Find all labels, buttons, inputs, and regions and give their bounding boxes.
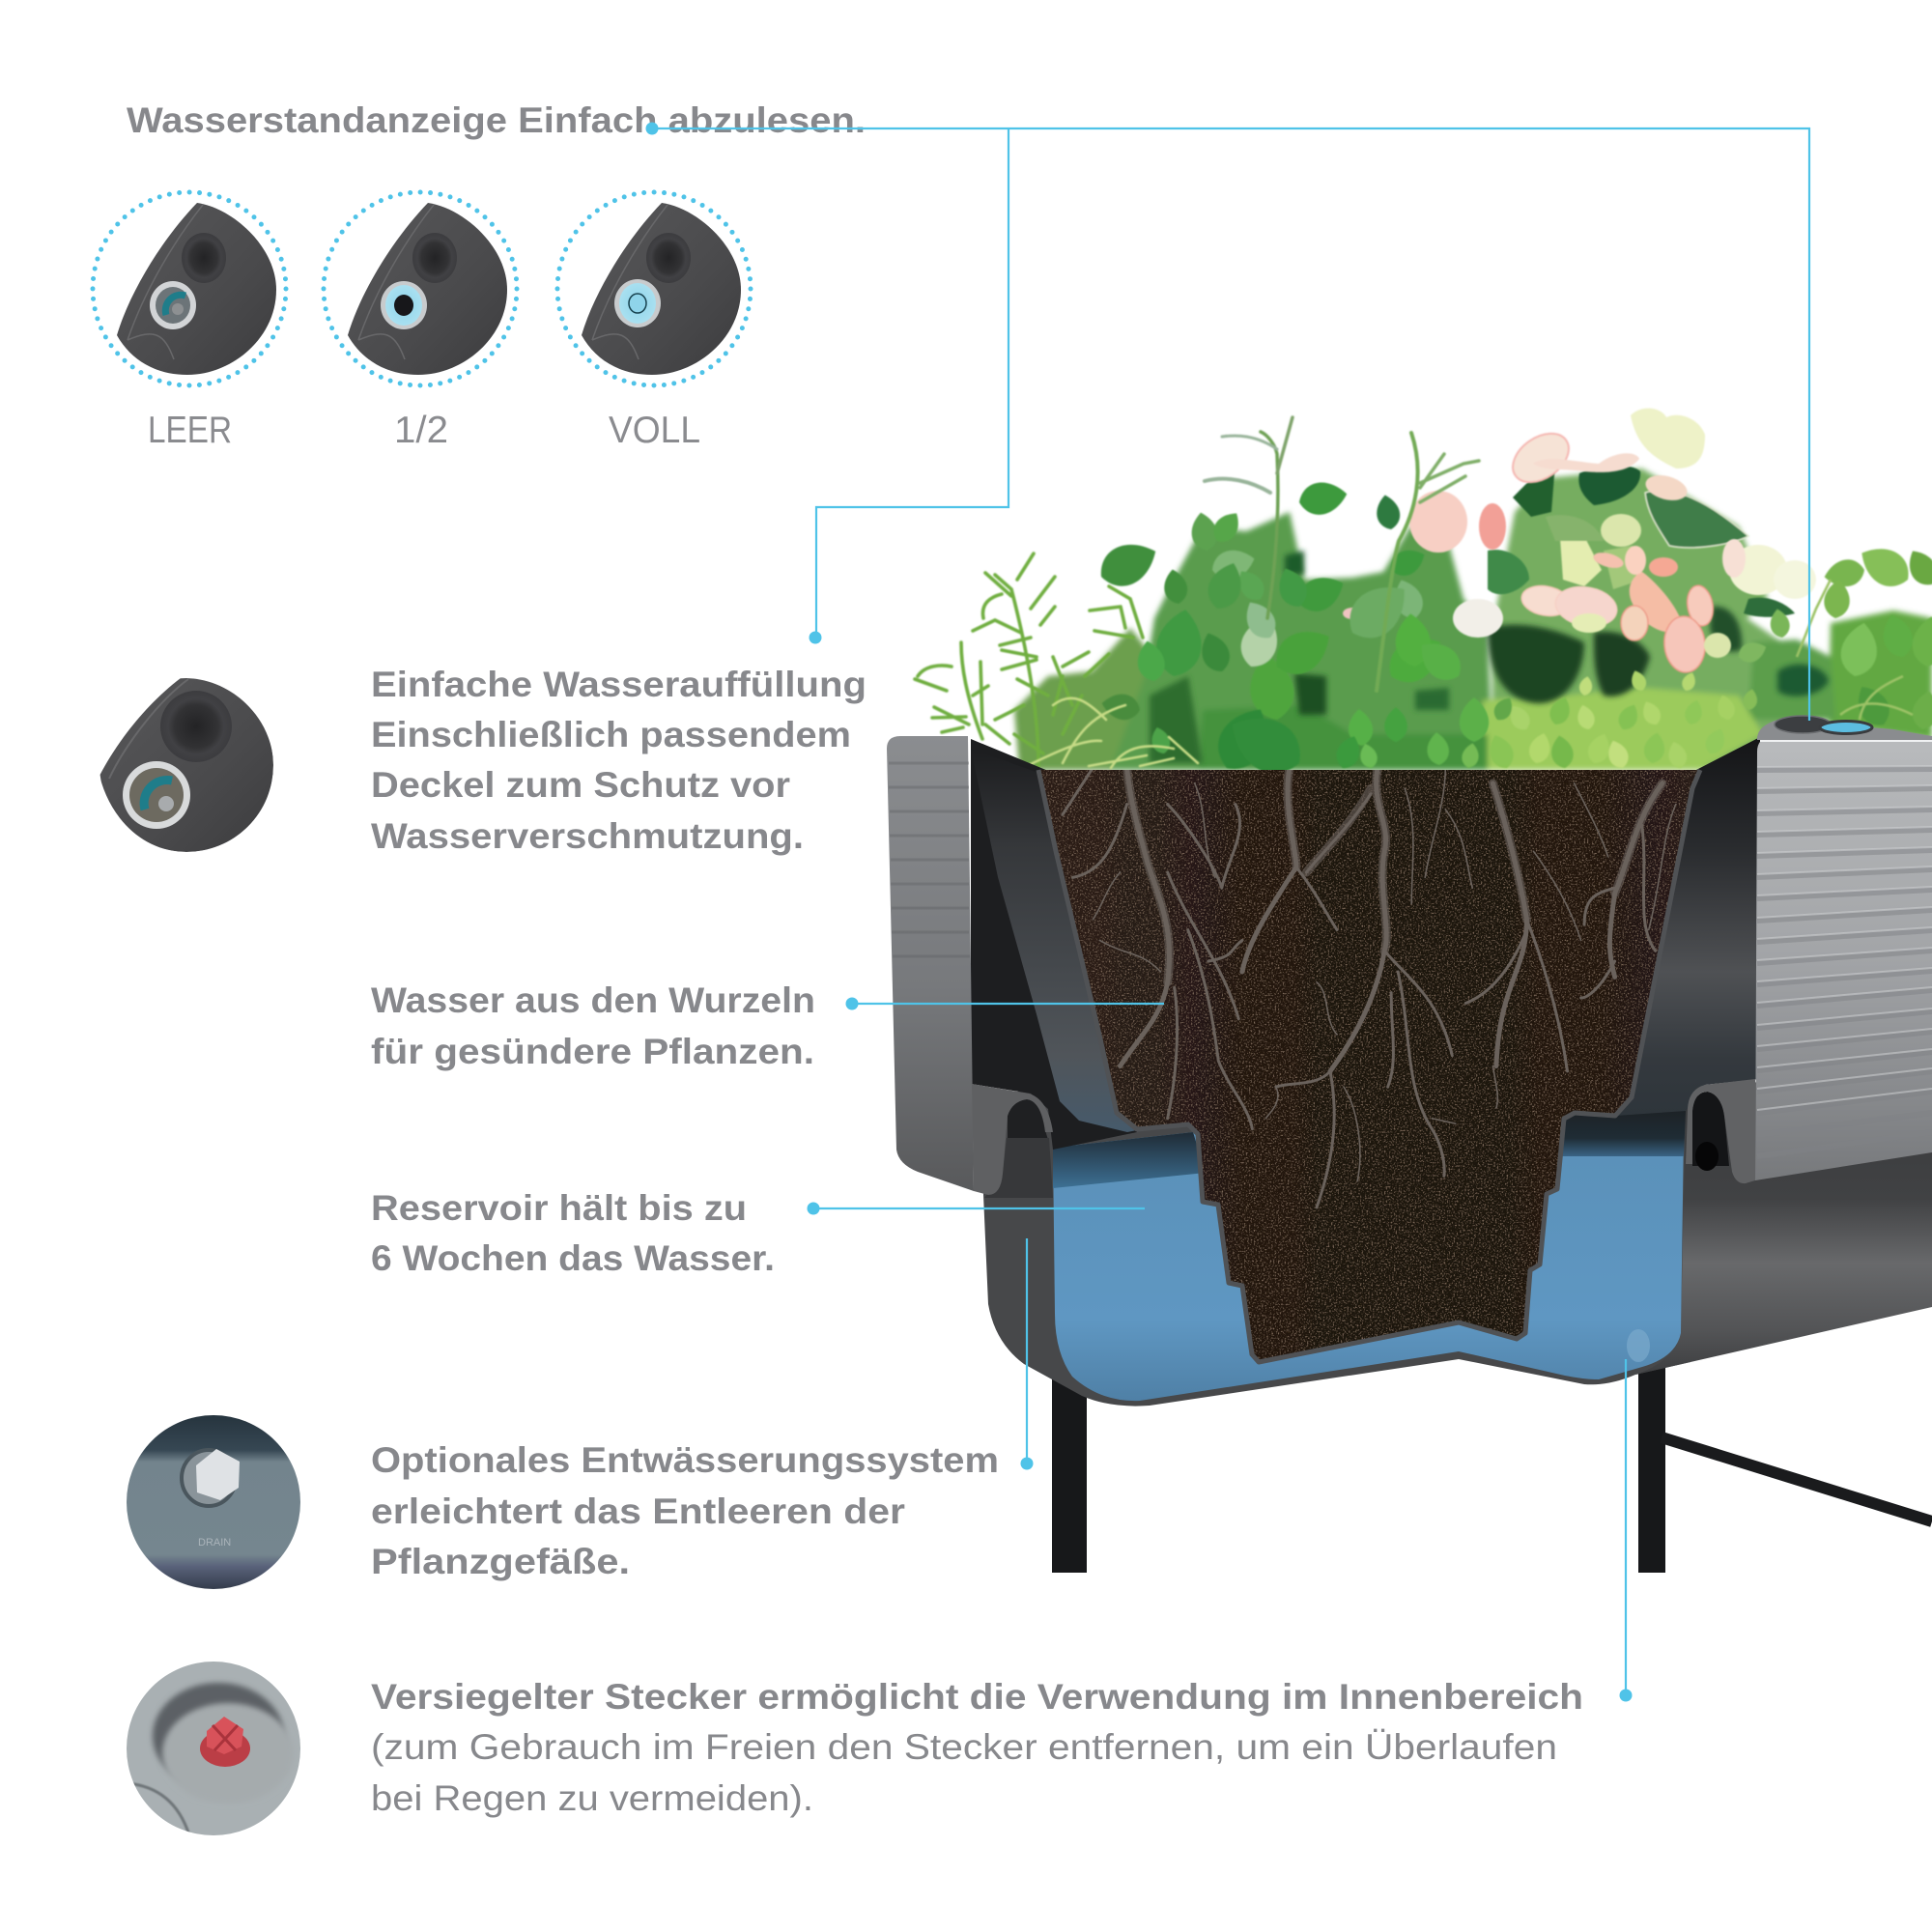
left inner cavity (971, 739, 1137, 1150)
text: drain system: Optionales Entwässerungssystem (371, 1440, 999, 1480)
ground cover leaves (1485, 668, 1759, 772)
dark water headspace right (1557, 1111, 1686, 1156)
text: sealed plug (371, 1677, 1583, 1818)
cap shape leer (117, 203, 276, 375)
label: 1/2: 1/2 (394, 410, 448, 451)
left leg (1052, 1372, 1087, 1573)
indicator (123, 761, 190, 829)
dotted ring leer (93, 192, 286, 385)
lower curve (133, 1781, 190, 1833)
bolt head (196, 1449, 240, 1500)
label: LEER: LEER (148, 410, 232, 451)
plug cross (207, 1717, 243, 1754)
right body side (1635, 1082, 1932, 1375)
plants (915, 409, 1932, 785)
text: reservoir: 6 Wochen das Wasser. (371, 1238, 775, 1278)
callout: plug leader (1619, 1359, 1633, 1702)
crease halb (358, 205, 434, 359)
begonia flowers (1343, 409, 1816, 674)
text: water refill (371, 665, 867, 856)
lid top and fill port (1757, 716, 1932, 740)
rear bolt (1695, 1142, 1719, 1171)
legs (1052, 1352, 1932, 1573)
text: roots (371, 980, 815, 1071)
drain bumps (1627, 1329, 1650, 1362)
right ribbed shell (1755, 736, 1932, 1180)
DRAIN label: DRAIN (198, 1537, 231, 1548)
left hook slot (1008, 1099, 1048, 1140)
left shell ribs (889, 763, 970, 956)
text: drain system: Pflanzgefäße. (371, 1542, 630, 1581)
callout: refill leader (810, 128, 1009, 643)
plug background (127, 1662, 300, 1835)
begonia leaves (1488, 464, 1795, 617)
roots (1063, 768, 1676, 1208)
plug detail photo (127, 1662, 300, 1835)
cross bar (1662, 1437, 1932, 1521)
gauge: voll (557, 192, 751, 385)
callout: roots leader (846, 997, 1164, 1010)
fill port leer (182, 233, 226, 283)
right shell highlights (1757, 766, 1932, 1110)
indicator leer (150, 281, 196, 329)
soil (1038, 770, 1700, 1362)
gauge: halb (324, 192, 517, 385)
planter cross-section (887, 716, 1932, 1406)
right herb bush (1736, 538, 1932, 731)
left hook lip (972, 1084, 1053, 1195)
red plug (200, 1717, 250, 1767)
right hook lip (1686, 1079, 1755, 1183)
text: reservoir (371, 1188, 775, 1278)
tall stems (1205, 417, 1479, 691)
bolt collar (182, 1450, 236, 1506)
text: water refill: Einschließlich passendem (371, 715, 851, 754)
text: drain system: erleichtert das Entleeren der (371, 1492, 905, 1531)
right hook slot (1692, 1092, 1729, 1166)
gauge: leer (93, 192, 286, 385)
soil liner outline (1038, 770, 1700, 1362)
cap shape voll (582, 203, 741, 375)
dotted ring halb (324, 192, 517, 385)
text: roots: für gesündere Pflanzen. (371, 1032, 814, 1071)
recess crescent (153, 1683, 284, 1789)
dark shadow areas (1150, 551, 1829, 763)
right shell ribs (1757, 769, 1932, 1156)
text: sealed plug: (zum Gebrauch im Freien den Stecker entfernen, um ein Überlaufen (371, 1727, 1557, 1767)
callout: drain leader (1020, 1238, 1034, 1470)
indicator voll (614, 279, 661, 327)
lid top (1757, 720, 1932, 740)
crease leer (128, 205, 203, 359)
dark water headspace left (1053, 1132, 1206, 1188)
right leg (1638, 1352, 1665, 1573)
crease voll (592, 205, 668, 359)
left inner wall (971, 749, 1137, 1132)
indicator halb (381, 281, 427, 329)
heading: water level indicator: Wasserstandanzeige Einfach abzulesen. (127, 100, 866, 140)
outer body wall (983, 1092, 1690, 1406)
callout: water gauge leader (645, 122, 1809, 721)
right inner wall (1615, 737, 1760, 1116)
callout: reservoir leader (808, 1202, 1145, 1215)
shell top highlight (1760, 738, 1932, 742)
fill cap (1775, 716, 1831, 733)
pale grass stems (1027, 698, 1198, 768)
drain background (127, 1415, 300, 1589)
fill port halb (412, 233, 457, 283)
right herb stems (1797, 580, 1913, 720)
label: VOLL: VOLL (609, 410, 700, 451)
lid detail photo (99, 678, 273, 852)
fill port (160, 691, 232, 762)
text: sealed plug: Versiegelter Stecker ermöglicht die Verwendung im Innenbereich (371, 1677, 1583, 1717)
dotted ring voll (557, 192, 751, 385)
text: water refill: Wasserverschmutzung. (371, 816, 804, 856)
plug flange (200, 1735, 250, 1767)
text: water refill: Einfache Wasserauffüllung (371, 665, 867, 704)
left ribbed shell (887, 736, 974, 1191)
text: drain system (371, 1440, 999, 1581)
text: roots: Wasser aus den Wurzeln (371, 980, 815, 1020)
mint leaves (1093, 478, 1489, 785)
cap shape halb (348, 203, 507, 375)
reservoir water (1053, 1130, 1684, 1401)
text: water refill: Deckel zum Schutz vor (371, 765, 790, 805)
text: sealed plug: bei Regen zu vermeiden). (371, 1778, 813, 1818)
water gauge window (1820, 721, 1872, 734)
recess floor (159, 1700, 286, 1792)
left wall shade below hook (984, 1138, 1053, 1198)
fill port voll (646, 233, 691, 283)
text: reservoir: Reservoir hält bis zu (371, 1188, 747, 1228)
lid shape (99, 678, 273, 852)
drain detail photo (127, 1415, 300, 1589)
foliage masses (1014, 469, 1932, 770)
rosemary sprigs (915, 554, 1143, 766)
crease (109, 679, 188, 779)
